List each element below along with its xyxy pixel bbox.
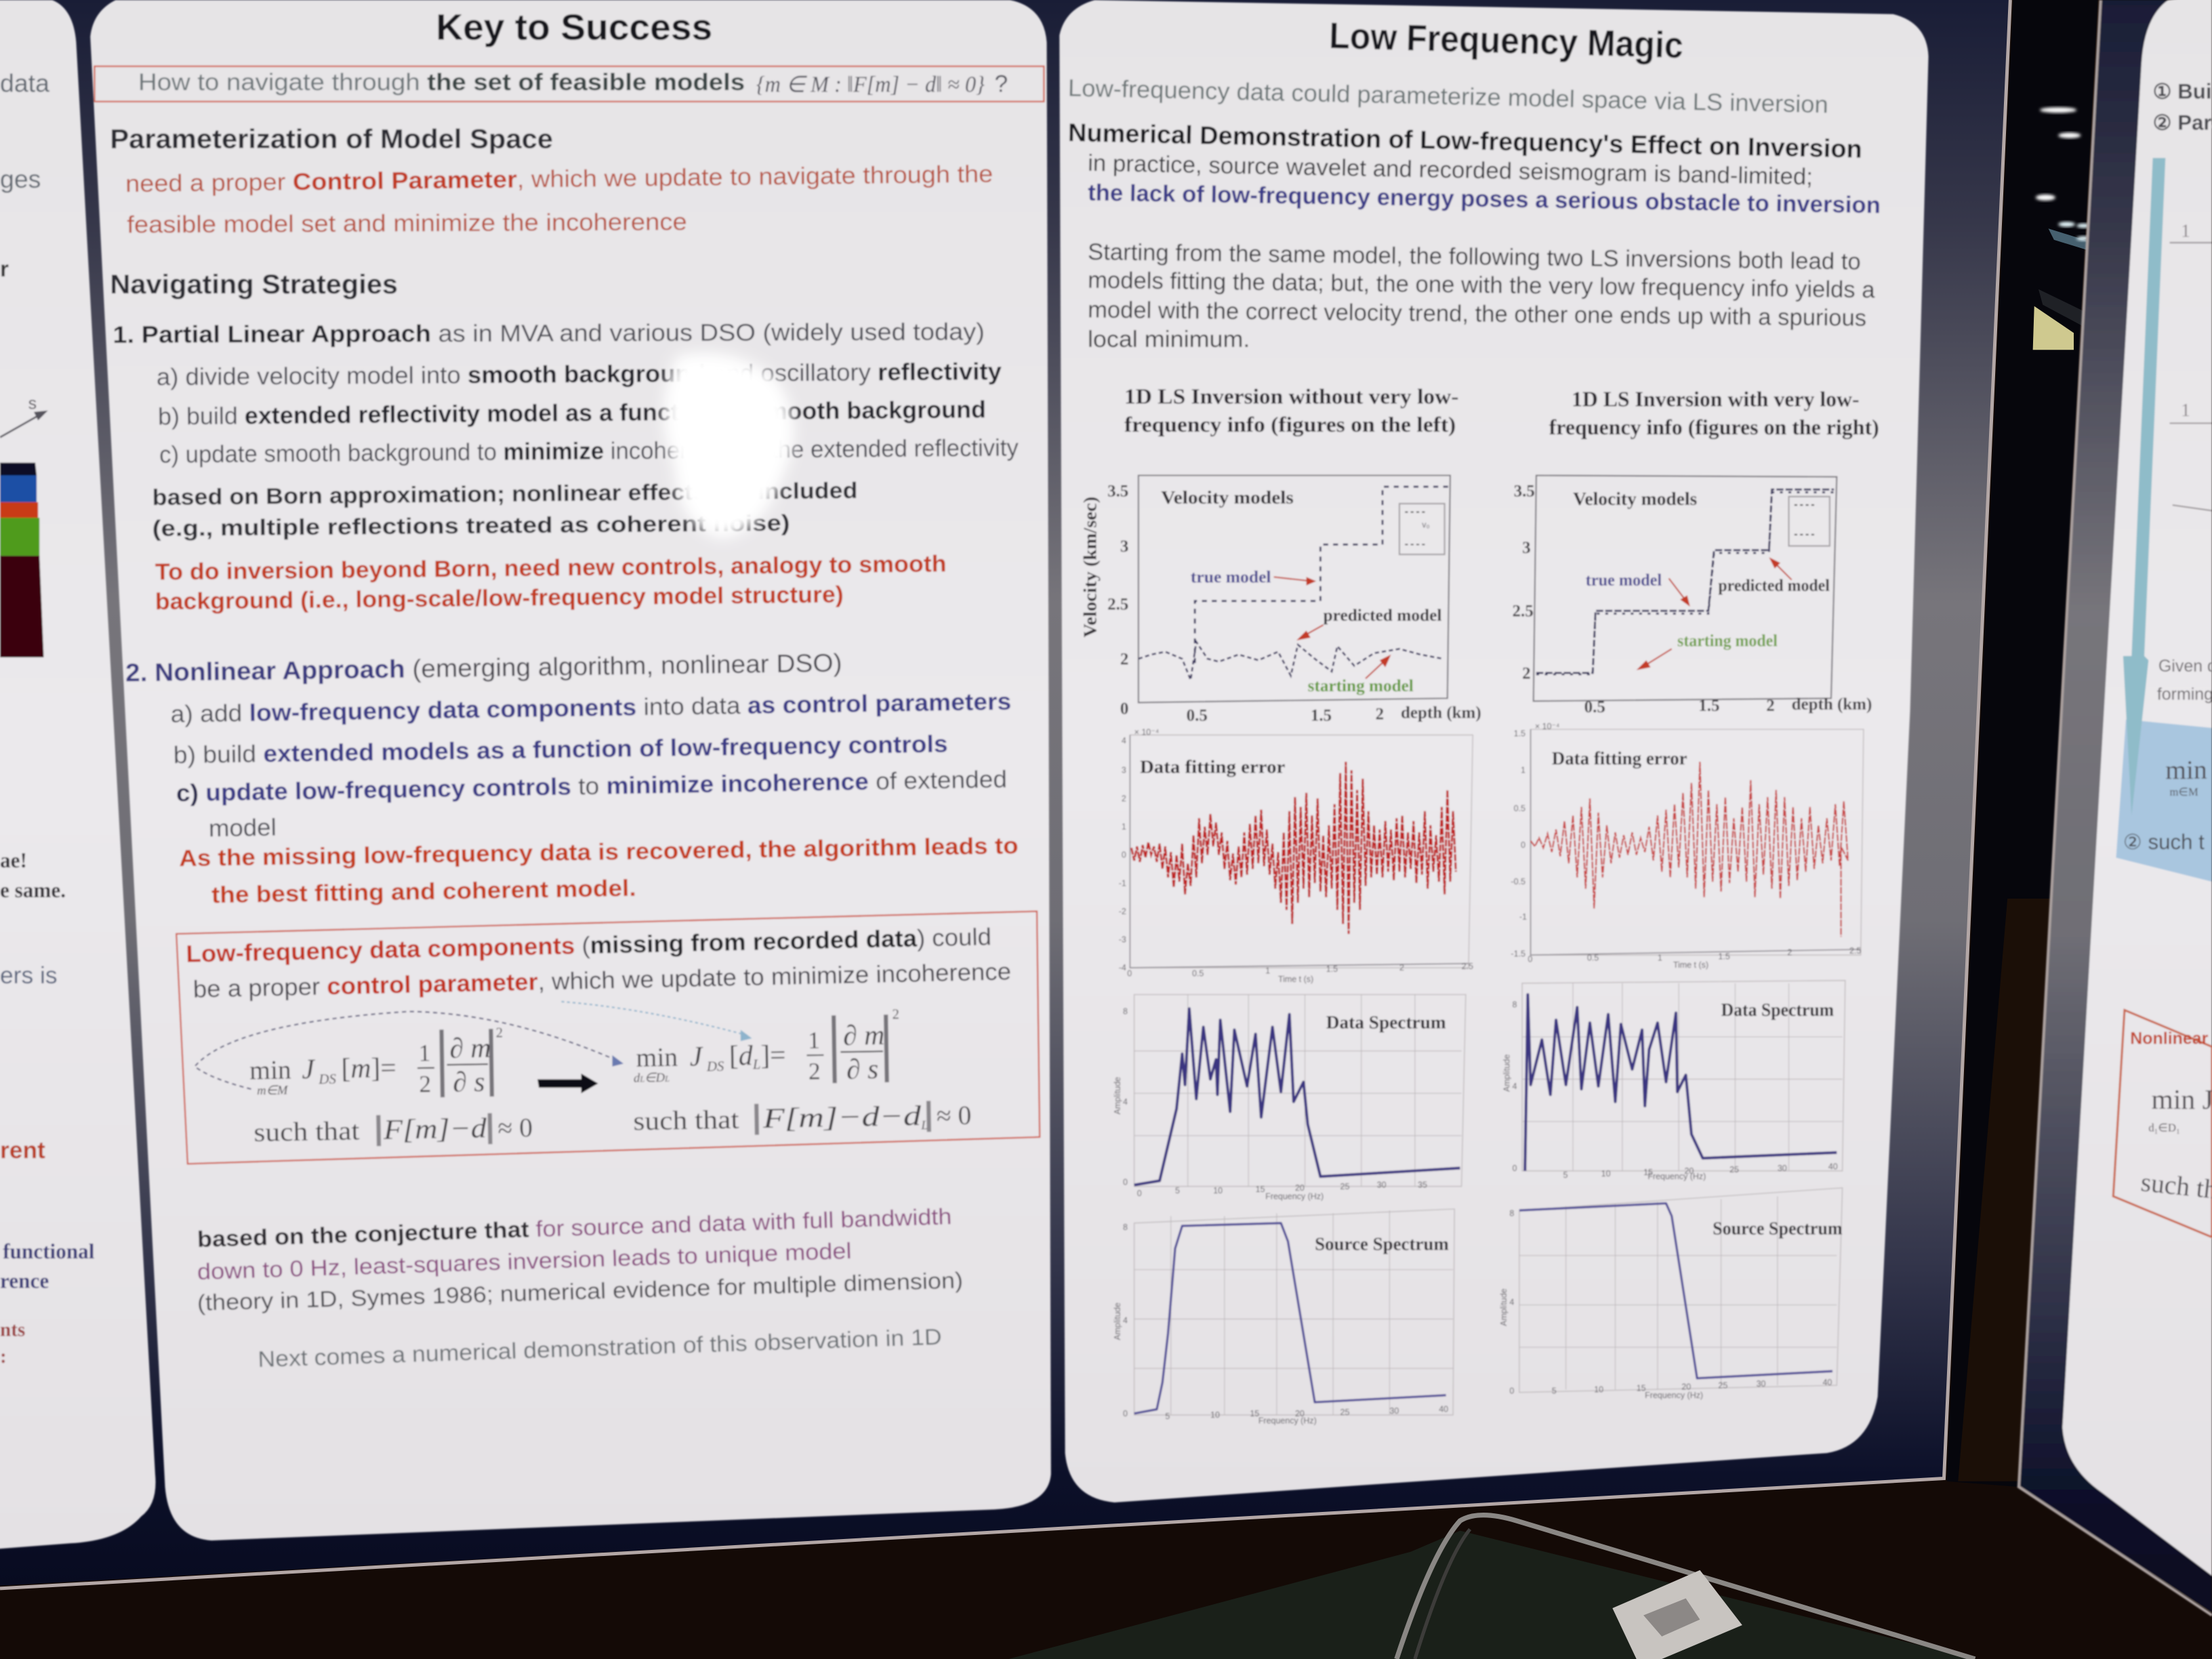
question box: {m ∈ M : ‖F[m] − d‖ ≈ 0} — [756, 72, 985, 97]
chart: velocity models, left: 2.5 — [1107, 595, 1128, 613]
text: description of two inversions — [1088, 239, 1876, 352]
equation: right constraint: L — [920, 1118, 928, 1132]
equation: right constraint: such that — [633, 1105, 739, 1136]
text: nonlinear approach: the best fitting and coherent model. — [211, 876, 636, 908]
foreground: chair — [1008, 1515, 1975, 1659]
question box — [94, 66, 1044, 102]
text: partial linear approach: b) build extended reflectivity model as a function of smooth background — [158, 396, 986, 430]
panel: neighbouring right panel: Nonlinear — [2130, 1029, 2209, 1048]
callout: low-frequency control parameter box: Low-frequency data components (missing from recorded data ) could — [186, 924, 991, 968]
subtitle: Low-frequency data could parameterize model space via LS inversion — [1068, 75, 1828, 118]
cropped text fragments on far left panel: data — [0, 68, 49, 97]
panel: neighbouring right panel: min — [2165, 755, 2207, 785]
chart: data fitting error, left: × 10⁻⁴ — [1134, 728, 1159, 737]
equation: left constraint: F[m]−d — [382, 1113, 487, 1146]
equation: right minimization: ]= — [760, 1040, 786, 1071]
chart: data fitting error, left: 3 — [1122, 766, 1126, 775]
chart: data spectrum, right: 20 — [1684, 1166, 1694, 1176]
chart: data fitting error, left: 1 — [1122, 822, 1126, 832]
chart: data spectrum, left: 25 — [1340, 1182, 1349, 1191]
question box: How to navigate through the set of feasible models — [138, 69, 745, 96]
callout: low-frequency control parameter box — [176, 912, 1040, 1164]
chart: source spectrum, right: 30 — [1757, 1379, 1766, 1389]
text: description of two inversions: model with the correct velocity trend, the other one ends up with a spurious — [1088, 297, 1866, 331]
chart: velocity models, right — [1513, 476, 1872, 716]
chart: source spectrum, right: 4 — [1509, 1298, 1514, 1307]
panel: neighbouring right panel: 1 — [2181, 221, 2190, 241]
glare reflection — [663, 352, 794, 539]
chart: velocity models, left: 3 — [1120, 537, 1128, 556]
text: partial linear approach: c) update smooth background to minimize incoherence of the extended reflectivity — [159, 434, 1019, 468]
colored velocity strip — [0, 463, 44, 657]
chart: data spectrum, left: 15 — [1256, 1185, 1265, 1194]
chart: data fitting error, right: 1.5 — [1718, 952, 1730, 962]
chart: source spectrum, left: Amplitude — [1113, 1303, 1122, 1340]
equation: right minimization: [d — [729, 1040, 753, 1072]
cropped text fragments on far left panel: r — [0, 257, 9, 282]
chart: data spectrum, right: 8 — [1513, 1000, 1517, 1009]
equation: left constraint: ≈ 0 — [497, 1113, 533, 1143]
chart: data spectrum, left: 0 — [1137, 1189, 1142, 1198]
text: nonlinear approach — [125, 649, 1019, 908]
chart: source spectrum, right: 40 — [1822, 1378, 1832, 1387]
equation: right constraint: F[m]−d−d — [762, 1101, 922, 1134]
chart: velocity models, right: predicted model — [1718, 577, 1830, 595]
chart: velocity models, right: 2.5 — [1513, 602, 1534, 621]
chart: data spectrum, right: Data Spectrum — [1721, 1000, 1835, 1020]
chart: source spectrum, left: 30 — [1389, 1406, 1399, 1416]
chart: data fitting error, right: 2 — [1787, 947, 1792, 957]
chart: source spectrum, right: 10 — [1594, 1385, 1603, 1395]
cropped text fragments on far left panel: rence — [0, 1269, 49, 1293]
chart: data spectrum, right — [1502, 981, 1845, 1181]
chart: source spectrum, right: 15 — [1637, 1383, 1646, 1393]
background: exhibition hall with lights — [1947, 0, 2097, 1487]
cropped text fragments on far left panel: rent — [0, 1137, 45, 1164]
text: conjecture: down to 0 Hz, least-squares inversion leads to unique model — [197, 1239, 852, 1285]
chart: source spectrum, left: 8 — [1123, 1223, 1128, 1232]
chart: velocity models, right: 3.5 — [1514, 483, 1535, 501]
cropped text fragments on far left panel: nts — [0, 1319, 25, 1340]
chart: source spectrum, right: 0 — [1509, 1387, 1514, 1396]
chart: data spectrum, right: 30 — [1778, 1164, 1787, 1173]
arrow: s axis — [0, 411, 48, 437]
equation: left minimization: DS — [318, 1071, 337, 1087]
chart: velocity models, right: 0.5 — [1584, 698, 1605, 716]
equation: right minimization: ∂ s — [846, 1054, 879, 1086]
chart: data spectrum, right: 25 — [1729, 1165, 1739, 1174]
text: nonlinear approach: model — [209, 815, 276, 842]
chart: data spectrum, left: 5 — [1175, 1186, 1180, 1195]
callout: low-frequency control parameter box: be a proper control parameter , which we update to minimize incoherence — [193, 958, 1011, 1003]
chart: data fitting error, left: -4 — [1119, 963, 1126, 972]
equation: right minimization: 1 — [808, 1027, 820, 1054]
equation: right constraint: ≈ 0 — [937, 1101, 972, 1131]
chart: data spectrum, right: 40 — [1828, 1162, 1838, 1172]
chart: data fitting error, right: 0 — [1521, 840, 1525, 850]
chart: data spectrum, right: 10 — [1601, 1169, 1611, 1179]
equation: right constraint — [633, 1100, 972, 1138]
panel: far left panel (cropped) — [0, 0, 156, 1549]
chart: data fitting error, left — [1119, 728, 1473, 984]
panel: neighbouring right panel: forming — [2157, 684, 2212, 703]
chart: data fitting error, left: -1 — [1119, 878, 1126, 888]
text: partial linear approach: To do inversion beyond Born, need new controls, analogy to smooth — [155, 551, 947, 586]
chart: source spectrum, left: 4 — [1123, 1316, 1128, 1326]
equation: right minimization: L — [752, 1056, 761, 1072]
chart: data fitting error, right: Time t (s) — [1673, 960, 1708, 970]
chart: velocity models, left: 3.5 — [1107, 483, 1128, 501]
text: band-limited — [1088, 150, 1881, 218]
text: band-limited: in practice, source wavelet and recorded seismogram is band-limited; — [1088, 150, 1813, 190]
equation: left minimization: min — [249, 1054, 291, 1085]
chart: velocity models, left: 1.5 — [1311, 707, 1332, 725]
chart: velocity models, left: v₀ — [1422, 520, 1430, 530]
chart: data fitting error, right: 1 — [1521, 766, 1525, 775]
chart: data spectrum, left: 4 — [1123, 1097, 1128, 1107]
text: nonlinear approach: b) build extended models as a function of low-frequency controls — [173, 731, 948, 769]
chart: source spectrum, left: 20 — [1295, 1409, 1305, 1418]
text: control parameter: need a proper Control Parameter , which we update to navigate through the — [125, 161, 993, 197]
chart: data spectrum, left: Data Spectrum — [1326, 1012, 1446, 1033]
text: conjecture: based on the conjecture that for source and data with full bandwidth — [197, 1204, 952, 1252]
text: description of two inversions: local minimum. — [1088, 327, 1250, 352]
chart: velocity models, left: Velocity models — [1161, 487, 1294, 508]
cropped text fragments on far left panel: : — [0, 1346, 7, 1368]
title: Key to Success — [436, 7, 712, 47]
chart: velocity models, left: starting model — [1308, 677, 1414, 695]
chart: data spectrum, left: 0 — [1123, 1178, 1128, 1187]
dashed curve arrow between equations — [194, 1002, 752, 1089]
chart: data fitting error, left: -2 — [1119, 907, 1126, 916]
equation: right minimization: J — [689, 1041, 704, 1072]
panel: neighbouring right panel — [2062, 0, 2212, 1576]
equation: right minimization — [632, 1006, 901, 1089]
chart: data fitting error, left: Time t (s) — [1278, 975, 1313, 984]
panel: neighbouring right panel: min J — [2151, 1084, 2212, 1115]
chart: source spectrum, left: 5 — [1165, 1412, 1170, 1421]
chart: source spectrum, left: Frequency (Hz) — [1258, 1416, 1317, 1425]
chart: data spectrum, right: 0 — [1513, 1164, 1517, 1173]
equation: right minimization: DS — [706, 1058, 724, 1074]
equation: left minimization: [m]= — [341, 1052, 396, 1084]
chart: velocity models, right: depth (km) — [1792, 695, 1872, 714]
chart: data fitting error, left: 4 — [1122, 736, 1126, 745]
chart: data fitting error, right: 0.5 — [1514, 804, 1525, 813]
chart: data fitting error, left: 2.5 — [1462, 962, 1473, 971]
heading: left column: 1D LS Inversion without very low- — [1124, 384, 1458, 408]
chart: data spectrum, left: Frequency (Hz) — [1265, 1191, 1324, 1201]
chart: velocity models, right: 2 — [1522, 664, 1531, 682]
text: next demonstration: Next comes a numerical demonstration of this observation in 1D — [258, 1325, 942, 1372]
title: Low Frequency Magic — [1329, 16, 1684, 66]
text: partial linear approach: a) divide velocity model into smooth background and oscillatory reflectivity — [157, 359, 1002, 390]
chart: data fitting error, left: 1.5 — [1326, 964, 1338, 974]
text: control parameter: feasible model set and minimize the incoherence — [127, 209, 687, 238]
panel: neighbouring right panel: ② such t — [2123, 830, 2205, 854]
text: partial linear approach: 1. Partial Linear Approach as in MVA and various DSO (widely used today) — [112, 319, 985, 348]
chart: data fitting error, left: 1 — [1265, 966, 1270, 975]
equation: left constraint — [253, 1112, 533, 1148]
heading: left column — [1124, 384, 1458, 436]
text: conjecture — [197, 1204, 963, 1316]
chart: data fitting error, right: -1.5 — [1511, 949, 1525, 958]
chart: data spectrum, right: 15 — [1643, 1168, 1653, 1177]
equation: right minimization: ∂ m — [843, 1020, 885, 1052]
chart: data spectrum, left: 30 — [1377, 1181, 1387, 1190]
chart: data spectrum, right: Amplitude — [1502, 1054, 1511, 1092]
cropped text fragments on far left panel: functional — [3, 1240, 95, 1263]
text: nonlinear approach: 2. Nonlinear Approach (emerging algorithm, nonlinear DSO) — [125, 649, 842, 687]
chart: velocity models, left: depth (km) — [1401, 704, 1481, 722]
chart: source spectrum, left — [1113, 1209, 1454, 1425]
text: conjecture: (theory in 1D, Symes 1986; numerical evidence for multiple dimension) — [197, 1268, 963, 1316]
equation: right minimization: 2 — [808, 1057, 821, 1085]
equation: left constraint: such that — [253, 1115, 360, 1147]
cropped text fragments on far left panel: ers is — [0, 962, 58, 989]
text: partial linear approach: background (i.e., long-scale/low-frequency model structure) — [155, 582, 844, 615]
chart: data fitting error, left: 0 — [1122, 851, 1126, 860]
text: description of two inversions: models fitting the data; but, the one with the very low frequency info yields a — [1088, 268, 1876, 303]
chart: velocity models, right: 3 — [1522, 539, 1531, 557]
chart: source spectrum, right: Frequency (Hz) — [1645, 1391, 1703, 1400]
equation: left minimization: 2 — [419, 1070, 431, 1097]
chart: data fitting error, left: 2 — [1122, 794, 1126, 803]
chart: velocity models, right: 2 — [1766, 697, 1775, 715]
chart: data fitting error, right: 1 — [1658, 954, 1662, 963]
chart: velocity models, left: 2 — [1120, 650, 1128, 668]
chart: source spectrum, left: 15 — [1250, 1409, 1259, 1418]
chart: data fitting error, right: 0 — [1528, 955, 1532, 964]
chart: data fitting error, right: 0.5 — [1587, 954, 1599, 963]
chart: velocity models, right: true model — [1586, 571, 1662, 590]
chart: data fitting error, right: -1 — [1519, 912, 1527, 922]
chart: data spectrum, left: 10 — [1213, 1186, 1223, 1195]
text: partial linear approach — [112, 319, 1019, 615]
heading: right column: 1D LS Inversion with very low- — [1572, 388, 1860, 411]
chart: source spectrum, left: 25 — [1340, 1408, 1349, 1417]
chart: data fitting error, left: 2 — [1399, 963, 1404, 972]
equation: left minimization: 2 — [496, 1024, 503, 1041]
chart: data fitting error, right: -0.5 — [1511, 877, 1525, 886]
text: description of two inversions: Starting from the same model, the following two LS inversions both lead to — [1088, 239, 1861, 275]
heading: numerical demonstration: Numerical Demonstration of Low-frequency's Effect on Inversion — [1068, 118, 1862, 163]
chart: data fitting error, left: 0 — [1127, 968, 1132, 978]
text: control parameter — [125, 161, 993, 238]
chart: source spectrum, left: 40 — [1439, 1405, 1448, 1414]
chart: source spectrum, right: 20 — [1681, 1382, 1691, 1391]
chart: velocity models, left: 2 — [1376, 705, 1384, 724]
chart: data fitting error, right: 2.5 — [1849, 946, 1861, 956]
chart: data spectrum, left — [1113, 995, 1466, 1201]
chart: source spectrum, right: 5 — [1552, 1387, 1557, 1396]
chart: source spectrum, right: 25 — [1718, 1380, 1727, 1390]
equation: right minimization: min — [636, 1042, 678, 1073]
chart: velocity models, left — [1080, 476, 1481, 725]
chart: velocity models, right: Velocity models — [1573, 489, 1697, 509]
chart: data fitting error, right — [1511, 722, 1864, 970]
text: band-limited: the lack of low-frequency energy poses a serious obstacle to inversion — [1088, 180, 1881, 218]
chart: velocity models, left: Velocity (km/sec) — [1080, 497, 1100, 638]
equation: right minimization: 2 — [892, 1006, 899, 1022]
question box: ? — [995, 70, 1008, 97]
chart: data fitting error, left: 0.5 — [1192, 968, 1204, 978]
equation: left minimization — [249, 1024, 504, 1101]
chart: data fitting error, left: Data fitting error — [1140, 757, 1285, 777]
cropped text fragments on far left panel: ges — [0, 165, 41, 193]
equation: left minimization: J — [302, 1054, 316, 1085]
text: nonlinear approach: c) update low-frequency controls to minimize incoherence of extended — [176, 766, 1007, 806]
chart: data spectrum, left: 35 — [1418, 1181, 1427, 1190]
chart: source spectrum, right — [1499, 1188, 1843, 1400]
chart: source spectrum, right: Amplitude — [1499, 1288, 1509, 1326]
chart: source spectrum, left: Source Spectrum — [1315, 1233, 1449, 1254]
text: partial linear approach: (e.g., multiple reflections treated as coherent noise) — [152, 511, 790, 541]
chart: velocity models, right: starting model — [1677, 632, 1778, 650]
cropped text fragments on far left panel — [0, 68, 95, 1368]
chart: data fitting error, left: -3 — [1119, 935, 1126, 945]
chart: data spectrum, right: 5 — [1563, 1170, 1568, 1180]
text: partial linear approach: based on Born approximation; nonlinear effects not included — [152, 478, 858, 510]
heading: Parameterization of Model Space: Parameterization of Model Space — [110, 125, 553, 155]
heading: right column: frequency info (figures on the right) — [1549, 415, 1879, 439]
equation: left minimization: ∂ m — [449, 1033, 491, 1065]
equation: left minimization: m∈M — [257, 1083, 289, 1098]
chart: data fitting error, right: Data fitting error — [1552, 748, 1687, 769]
chart: data spectrum, left: 8 — [1123, 1007, 1128, 1017]
chart: velocity models, left: true model — [1191, 569, 1271, 587]
equation: left minimization: 1 — [418, 1039, 431, 1067]
arrow: black — [537, 1073, 598, 1093]
chart: velocity models, left: 0.5 — [1187, 707, 1208, 725]
neighbouring poster board on the right — [2019, 0, 2212, 1615]
chart: data spectrum, right: 4 — [1513, 1082, 1517, 1091]
chart: data fitting error, right: × 10⁻⁴ — [1535, 722, 1559, 731]
panel: Key to Success — [90, 0, 1051, 1540]
chart: data spectrum, right: Frequency (Hz) — [1647, 1172, 1706, 1181]
panel: Low Frequency Magic — [1059, 0, 1929, 1502]
chart: source spectrum, right: 8 — [1509, 1208, 1514, 1218]
heading: Navigating Strategies: Navigating Strategies — [110, 270, 398, 300]
chart: velocity models, left: predicted model — [1324, 607, 1441, 625]
equation: left minimization: ∂ s — [453, 1067, 485, 1099]
chart: data spectrum, left: Amplitude — [1113, 1077, 1122, 1114]
cropped text fragments on far left panel: e same. — [0, 878, 66, 902]
chart: source spectrum, right: Source Spectrum — [1713, 1218, 1843, 1238]
equation: right minimization: dL∈DL — [634, 1071, 670, 1086]
cropped text fragments on far left panel: ae! — [0, 848, 27, 872]
heading: left column: frequency info (figures on the left) — [1124, 413, 1456, 436]
text: nonlinear approach: a) add low-frequency data components into data as control parameters — [170, 689, 1012, 728]
cropped text fragments on far left panel: s — [28, 394, 37, 413]
chart: velocity models, left: 0 — [1120, 699, 1128, 718]
panel: neighbouring right panel: d₁∈D₁ — [2148, 1121, 2180, 1134]
chart: data spectrum, left: 20 — [1295, 1183, 1305, 1193]
chart: source spectrum, left: 0 — [1123, 1409, 1128, 1418]
chart: data fitting error, right: 1.5 — [1514, 729, 1525, 739]
chart: source spectrum, left: 10 — [1210, 1410, 1220, 1420]
text: nonlinear approach: As the missing low-frequency data is recovered, the algorithm leads to — [179, 833, 1019, 872]
chart: velocity models, right: 1.5 — [1698, 697, 1720, 715]
heading: right column — [1549, 388, 1879, 439]
panel: neighbouring right panel: 1 — [2181, 400, 2190, 420]
panel: neighbouring right panel: m∈M — [2170, 785, 2198, 798]
